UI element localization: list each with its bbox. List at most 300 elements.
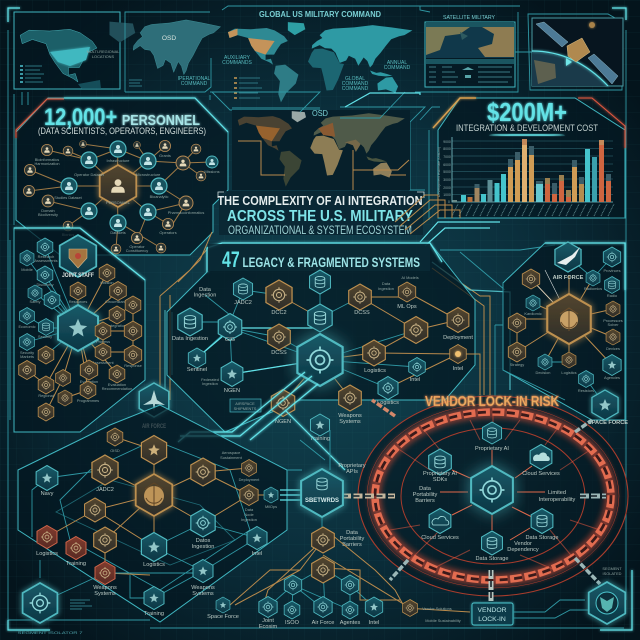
panel: air force / marine bbox=[495, 242, 628, 426]
vendor lock-in chain ring bbox=[358, 396, 628, 596]
map: north america bbox=[20, 22, 135, 82]
node: vendor solutions: Mobile Sustainability bbox=[425, 618, 461, 623]
node: data portability label: Barriers bbox=[342, 542, 362, 548]
tan nodes: Logistics bbox=[561, 370, 577, 375]
axis labels: 1000 bbox=[443, 193, 451, 197]
tan nodes: Regional bbox=[38, 393, 54, 398]
teal nodes bbox=[524, 247, 621, 393]
node captions: Operator Dataset bbox=[74, 172, 105, 177]
node: data ingestion center bbox=[191, 509, 215, 550]
chain links bbox=[375, 412, 611, 580]
legend bbox=[234, 78, 237, 98]
tan nodes: Assessment bbox=[92, 360, 115, 365]
teal nodes: Kardiomic bbox=[524, 311, 542, 316]
teal nodes: Markets bbox=[20, 354, 34, 359]
node: joint ecosim: Ecosim bbox=[259, 624, 278, 630]
network links bbox=[190, 285, 480, 403]
category ticks bbox=[452, 204, 614, 216]
axis labels: 8000 bbox=[443, 147, 451, 151]
node: ML Ops: Data bbox=[382, 281, 391, 286]
node captions: Grants bbox=[159, 153, 171, 158]
panel: global military command: COMMAND bbox=[342, 86, 369, 92]
teal personnel nodes bbox=[61, 141, 167, 231]
node: NGEN: Ingestion bbox=[202, 381, 218, 386]
legend bbox=[20, 65, 44, 83]
node: logistics red bbox=[36, 526, 58, 557]
node: training bbox=[310, 414, 330, 442]
tan nodes: Integration bbox=[108, 323, 126, 328]
icon: shield emblem bbox=[589, 582, 625, 624]
title line 2: ACROSS THE U.S. MILITARY bbox=[227, 208, 413, 225]
node: weapons systems bbox=[338, 385, 362, 425]
node: cloud services left bbox=[421, 508, 459, 541]
teal nodes: Assessments bbox=[34, 258, 58, 263]
tan nodes: Solver bbox=[607, 322, 619, 327]
node captions: Missions bbox=[204, 169, 220, 174]
node captions: Pharmacoinformatics bbox=[168, 210, 204, 215]
node: data ingestion: Data Ingestion bbox=[172, 336, 208, 342]
chain right bbox=[580, 494, 606, 498]
node captions: Operator bbox=[129, 244, 145, 249]
node: central hub bbox=[471, 466, 513, 514]
central personnel node: PERSONNEL bbox=[106, 200, 131, 205]
red web bbox=[390, 412, 600, 570]
network links bbox=[32, 437, 323, 605]
node captions: Operators bbox=[159, 230, 177, 235]
subheading: (DATA SCIENTISTS, OPERATORS, ENGINEERS) bbox=[38, 126, 206, 136]
node: NGEN lower bbox=[271, 390, 295, 425]
node: map emblem bbox=[85, 498, 105, 522]
node: agentes bbox=[340, 601, 360, 626]
satellite map bbox=[426, 27, 514, 58]
node: JADC2: JADC2 bbox=[234, 300, 252, 306]
node: weapons red: Weapons bbox=[93, 585, 117, 591]
panel: asia map bbox=[125, 12, 221, 92]
node: data ingestion center: Datos bbox=[196, 538, 211, 544]
chain glow bbox=[375, 412, 611, 580]
labels: AUXILIARY bbox=[224, 55, 251, 61]
axis labels: 7000 bbox=[443, 155, 451, 159]
node: proprietary APIs label: Proprietary bbox=[338, 463, 366, 469]
node: training teal: Training bbox=[144, 611, 164, 617]
node: joint ecosim bbox=[259, 596, 278, 630]
label: OSD: OSD bbox=[312, 109, 328, 118]
teal nodes: Radiomics bbox=[584, 286, 602, 291]
label: data ingestion: Ingestion bbox=[194, 292, 216, 298]
panel: asia map: COMMAND bbox=[181, 81, 208, 87]
central personnel node bbox=[100, 165, 136, 207]
axis title: Development Estimate (USDm) bbox=[437, 147, 441, 197]
node: intel teal bbox=[409, 358, 425, 383]
box: vendor lock-in: VENDOR bbox=[477, 607, 507, 614]
node: DCC2: DCC2 bbox=[271, 310, 287, 316]
node: weapons systems: Weapons bbox=[338, 413, 362, 419]
teal nodes: Security bbox=[20, 350, 34, 355]
node captions: Constituency bbox=[126, 248, 148, 253]
node: air force: Air Force bbox=[312, 620, 334, 626]
node: space force: SPACE FORCE bbox=[588, 420, 628, 426]
node: deployment bbox=[239, 460, 260, 482]
node: intel bbox=[247, 526, 267, 557]
teal nodes: Decision bbox=[536, 370, 550, 375]
node: weapons red bbox=[93, 562, 117, 597]
node: tan upper bbox=[312, 527, 334, 553]
node captions: Biodiversity bbox=[38, 212, 58, 217]
tan nodes: Response bbox=[124, 363, 142, 368]
axis labels: 6000 bbox=[443, 163, 451, 167]
teal nodes: Safety bbox=[29, 299, 41, 304]
axis labels: 3000 bbox=[443, 178, 451, 182]
node: DCSS right bbox=[349, 284, 371, 316]
panel: global military command: GLOBAL bbox=[345, 76, 365, 82]
node: marine emblem bbox=[547, 294, 591, 344]
panel: global military command bbox=[212, 6, 430, 110]
label: data ingestion: Data bbox=[199, 287, 211, 293]
node: sentinel bbox=[187, 348, 207, 373]
node: deployment: Deployment bbox=[239, 477, 260, 482]
teal nodes: Radio bbox=[607, 293, 617, 298]
tan nodes: Mission bbox=[100, 280, 114, 285]
node: ML Ops bbox=[378, 275, 419, 310]
node: intel: Intel bbox=[369, 620, 379, 626]
node: corner hub bbox=[23, 583, 92, 623]
teal nodes: Discovery bbox=[36, 282, 54, 287]
node: cloud services right: Cloud Services bbox=[522, 471, 560, 477]
node: OISD: OISD bbox=[110, 448, 120, 453]
node: proprietary AI: Proprietary AI bbox=[475, 446, 509, 452]
node: proprietary AI SDKs: SDKs bbox=[433, 477, 447, 483]
node: training red bbox=[66, 536, 86, 567]
node: top teal bbox=[310, 270, 330, 294]
panel: vendor lock-in core bbox=[413, 422, 576, 562]
panel: global military command: COMMANDS bbox=[222, 60, 253, 66]
chain bottom left bbox=[390, 560, 408, 580]
node: training red: Training bbox=[66, 561, 86, 567]
ring interior shade bbox=[358, 396, 628, 596]
outer rings bbox=[358, 396, 628, 596]
node: intel bbox=[365, 597, 383, 626]
node: proprietary AI bbox=[475, 422, 509, 452]
node: navy bbox=[36, 466, 58, 497]
subheading: INTEGRATION & DEVELOPMENT COST bbox=[456, 123, 598, 134]
heading: GLOBAL US MILITARY COMMAND bbox=[259, 10, 381, 19]
node: tan center bbox=[404, 316, 428, 344]
chain bottom right bbox=[575, 558, 600, 584]
node captions: Bioanalytic bbox=[150, 194, 168, 199]
node: intel tan bbox=[450, 344, 466, 372]
node: proprietary APIs label: APIs bbox=[346, 469, 358, 475]
node captions: Domain bbox=[41, 208, 55, 213]
node: DCC2 bbox=[266, 280, 292, 316]
node captions: Harmonization bbox=[34, 161, 60, 166]
data table bbox=[429, 67, 512, 82]
node: ML Ops: AI Models bbox=[401, 275, 419, 280]
node: deployment bbox=[443, 308, 473, 341]
node: red emblem: Sustainment bbox=[220, 455, 243, 460]
node: JADC2 bbox=[233, 278, 253, 306]
node: ML Ops: ML Ops bbox=[397, 304, 417, 310]
node: data ingestion bbox=[172, 308, 208, 342]
panel: OSD world map bbox=[232, 107, 425, 190]
node: data storage right: Data Storage bbox=[526, 535, 558, 541]
node: logistics bbox=[141, 532, 167, 568]
node: vendor solutions: Vendor Solutions bbox=[422, 606, 452, 611]
node: proprietary AI SDKs bbox=[423, 449, 457, 483]
node: central hub bbox=[297, 334, 343, 386]
chart grid and axis bbox=[452, 141, 613, 194]
heading: 47 LEGACY & FRAGMENTED SYSTEMS bbox=[222, 247, 420, 272]
node: red emblem: Aerospace bbox=[222, 450, 240, 455]
node: navy: Navy bbox=[41, 491, 54, 497]
tan personnel nodes bbox=[23, 140, 218, 254]
axis labels bbox=[443, 140, 451, 204]
teal nodes: Provinces bbox=[603, 268, 621, 273]
node: JADC2: JADC2 bbox=[96, 487, 114, 493]
tan nodes: Processors bbox=[603, 318, 623, 323]
title line 3: ORGANIZATIONAL & SYSTEM ECOSYSTEM bbox=[228, 223, 412, 237]
arrows bbox=[440, 450, 545, 540]
node: ML Ops: Ingestion bbox=[378, 286, 394, 291]
tan nodes: Evaluation bbox=[108, 382, 126, 387]
label: data portability barriers: Data bbox=[419, 486, 431, 492]
heading: $200M+ bbox=[487, 97, 567, 127]
heading: 12,000+ PERSONNEL bbox=[44, 104, 200, 131]
node captions: Datasets bbox=[110, 230, 126, 235]
node: data portability label: Data bbox=[346, 530, 358, 536]
node: weapons teal: Weapons bbox=[191, 585, 215, 591]
tan nodes: Recommendation bbox=[102, 386, 132, 391]
node: data ingestion: Ingestion bbox=[241, 517, 257, 522]
node: logistics: Logistics bbox=[143, 562, 165, 568]
node: space force small: Space Force bbox=[207, 614, 239, 620]
node: central marine emblem bbox=[136, 474, 172, 516]
box: vendor lock-in: LOCK-IN bbox=[478, 616, 506, 623]
node: air force bbox=[553, 242, 584, 281]
node: DCSS left: DCSS bbox=[271, 350, 287, 356]
connector: vendor box to shield bbox=[513, 600, 590, 618]
node captions: Bionics bbox=[62, 232, 74, 237]
node: training: Training bbox=[310, 436, 330, 442]
links bbox=[262, 535, 470, 612]
label: vendor dependency: Vendor bbox=[514, 541, 532, 547]
box: vendor lock-in bbox=[472, 603, 513, 625]
panel: global military command: COMMAND bbox=[384, 65, 411, 71]
teal nodes: Security bbox=[38, 334, 52, 339]
node: JADC2 bbox=[92, 455, 118, 493]
teal nodes: Agencies bbox=[604, 375, 620, 380]
axis labels: 2000 bbox=[443, 186, 451, 190]
node: weapons systems: Systems bbox=[339, 419, 361, 425]
node: data storage right bbox=[526, 508, 558, 541]
node: cloud services left: Cloud Services bbox=[421, 535, 459, 541]
node: joint staff emblem bbox=[60, 235, 96, 279]
node: OISD bbox=[107, 428, 123, 453]
node: ISOO: ISOO bbox=[285, 620, 300, 626]
satellite bbox=[536, 22, 618, 84]
node: teal right bbox=[341, 575, 359, 595]
node: logistics teal bbox=[377, 376, 399, 406]
axis labels: 9000 bbox=[443, 140, 451, 144]
label box: airspace shipments bbox=[230, 399, 261, 412]
teal nodes: Mobile bbox=[21, 267, 33, 272]
node: sentinel: Sentinel bbox=[187, 367, 207, 373]
satellite style map bbox=[238, 111, 405, 187]
axis labels: 0 bbox=[448, 200, 450, 204]
map: asia bbox=[133, 20, 221, 75]
panel: 47 legacy systems bbox=[167, 243, 480, 470]
tan nodes: Programmes bbox=[77, 398, 99, 403]
node: data ingestion bbox=[240, 484, 258, 522]
panel: personnel bbox=[16, 98, 228, 255]
node: air force top bbox=[139, 383, 169, 430]
node: logistics red: Logistics bbox=[36, 551, 58, 557]
panel: satellite photo bbox=[515, 14, 623, 90]
world map bbox=[228, 22, 412, 102]
tan nodes: Evaluation bbox=[80, 379, 98, 384]
bar chart bbox=[437, 137, 614, 216]
node: data storage bottom bbox=[476, 531, 508, 562]
panel: north america map: LOCATIONS bbox=[92, 54, 114, 59]
panel: title block bbox=[218, 191, 424, 237]
chain top right bbox=[575, 420, 592, 432]
node: training teal bbox=[144, 586, 164, 617]
caption: side note bbox=[602, 566, 622, 576]
panel: cost bbox=[410, 97, 625, 220]
node captions bbox=[34, 153, 220, 253]
side chains bbox=[342, 400, 606, 604]
node: intel teal: Intel bbox=[410, 377, 420, 383]
caption: side note: SEGMENT bbox=[602, 566, 622, 571]
node: intel: Intel bbox=[252, 551, 262, 557]
label: vendor dependency: Dependency bbox=[507, 547, 539, 553]
earth limb bbox=[532, 52, 607, 86]
node: DCSS right: DCSS bbox=[354, 310, 370, 316]
teal nodes: Economic bbox=[18, 324, 36, 329]
node: space force small bbox=[207, 597, 239, 620]
node: data ingestion: Node bbox=[244, 512, 254, 517]
cyan bars bbox=[452, 149, 597, 202]
node: proprietary AI SDKs: Proprietary AI bbox=[423, 471, 457, 477]
panel: joint staff bbox=[10, 228, 145, 432]
node: logistics tan bbox=[363, 340, 386, 374]
node: DCSS left bbox=[268, 324, 290, 356]
node: weapons teal bbox=[191, 560, 215, 597]
node captions: Bioinformatics bbox=[35, 157, 59, 162]
chain top left bbox=[372, 400, 395, 416]
node: weapons teal: Systems bbox=[192, 591, 214, 597]
node captions: Microstructure bbox=[136, 172, 160, 177]
label: operations command: IPERATIONAL bbox=[178, 76, 211, 82]
teal nodes: Research bbox=[38, 254, 54, 259]
node: intel tan: Intel bbox=[453, 366, 463, 372]
network links bbox=[27, 247, 133, 412]
title line 1: THE COMPLEXITY OF AI INTEGRATION bbox=[218, 193, 422, 208]
node: vendor solutions bbox=[403, 600, 461, 623]
connector to SBETWRDS bbox=[287, 430, 330, 530]
connector bundles bbox=[22, 92, 555, 400]
node: NGEN: Federated bbox=[201, 377, 219, 382]
node: NGEN bbox=[201, 362, 243, 394]
panel: operational hexagon bottom left bbox=[18, 405, 323, 623]
node: deployment: Deployment bbox=[443, 335, 473, 341]
panel: global military command: COMMAND bbox=[342, 81, 369, 87]
tan nodes bbox=[19, 264, 142, 421]
node: GIG bbox=[218, 314, 242, 343]
node: MilOps bbox=[264, 487, 278, 509]
tan nodes: Devices bbox=[606, 346, 620, 351]
node captions: Studies Dataset bbox=[54, 195, 83, 200]
cluster: bottom ecosystem bbox=[259, 527, 470, 630]
node: logistics tan: Logistics bbox=[364, 368, 386, 374]
node: joint ecosim: Joint bbox=[262, 618, 274, 624]
node: data storage bottom: Data Storage bbox=[476, 556, 508, 562]
heading: SATELLITE MILITARY bbox=[443, 15, 495, 21]
node: red emblem bbox=[191, 450, 243, 486]
label: data portability barriers: Barriers bbox=[415, 498, 435, 504]
node: space force bbox=[588, 390, 628, 426]
teal nodes bbox=[18, 238, 60, 359]
tan nodes: Process bbox=[96, 339, 110, 344]
node captions: Infrastructure bbox=[107, 158, 129, 163]
bar caps bbox=[474, 139, 611, 197]
node: air force: AIR FORCE bbox=[553, 275, 584, 281]
node: tan lower bbox=[312, 557, 334, 583]
node: MilOps: MilOps bbox=[265, 504, 277, 509]
node: data ingestion center: Ingestion bbox=[192, 544, 214, 550]
network links bbox=[29, 144, 212, 249]
label box: airspace shipments: SHIPMENTS bbox=[234, 406, 257, 411]
axis labels: 5000 bbox=[443, 170, 451, 174]
network links bbox=[517, 257, 613, 405]
footer text: SEGMENT ISOLATOR 7 bbox=[18, 630, 84, 635]
teal nodes: Resistors bbox=[578, 388, 594, 393]
tan nodes: Resources bbox=[69, 299, 87, 304]
node: SBETWRDS bbox=[301, 469, 343, 517]
panel: north america map bbox=[14, 12, 135, 89]
panel: global military command: ANNUAL bbox=[387, 60, 407, 66]
legend bbox=[129, 80, 142, 86]
chain bottom bbox=[488, 570, 494, 604]
node: data ingestion: Data bbox=[245, 507, 254, 512]
label: OSD: OSD bbox=[162, 35, 176, 42]
label: data portability barriers: Portability bbox=[413, 492, 437, 498]
label box: airspace shipments: AIRSPACE bbox=[235, 401, 255, 406]
label: limited interoperability: Limited bbox=[548, 490, 566, 496]
node: ISOO bbox=[284, 601, 300, 626]
caption: side note: ISOLATED bbox=[603, 571, 622, 576]
red bars bbox=[545, 145, 611, 202]
label: vendor lock-in risk: VENDOR LOCK-IN RISK bbox=[425, 393, 559, 410]
node: agentes: Agentes bbox=[340, 620, 360, 626]
node: air force top: AIR FORCE bbox=[142, 424, 166, 430]
tan nodes: Circumstances bbox=[105, 299, 131, 304]
node: data portability label: Portability bbox=[340, 536, 364, 542]
node: central joint hub bbox=[58, 305, 98, 351]
caption: MULTI-REGIONAL bbox=[87, 49, 120, 54]
node: cloud services right bbox=[522, 444, 560, 477]
node: mid teal bbox=[308, 304, 332, 332]
node: logistics teal: Logistics bbox=[377, 400, 399, 406]
node: NGEN: NGEN bbox=[224, 388, 240, 394]
tan nodes: Strategy bbox=[510, 362, 524, 367]
node: top emblem bbox=[141, 436, 167, 464]
node: air force bbox=[312, 596, 334, 626]
tan bars bbox=[468, 145, 584, 202]
node: joint staff emblem: JOINT STAFF bbox=[62, 272, 94, 279]
tan nodes bbox=[508, 269, 623, 375]
node: NGEN lower: NGEN bbox=[275, 419, 291, 425]
node: teal left bbox=[284, 575, 302, 595]
